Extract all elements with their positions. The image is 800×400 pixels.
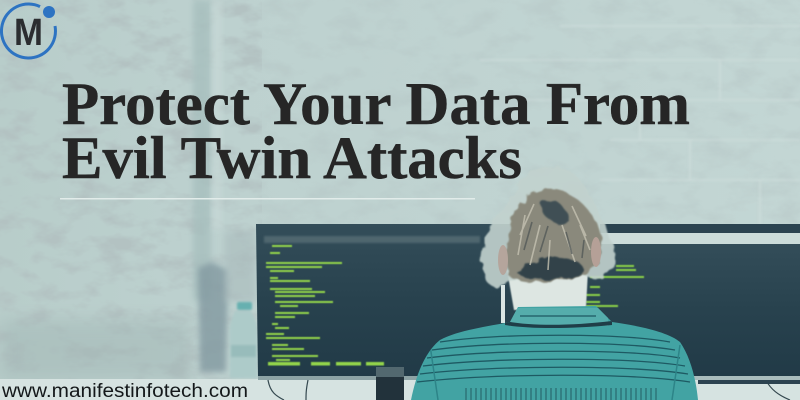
water bottle [230, 302, 257, 378]
monitor stand [376, 367, 404, 400]
cables [268, 378, 790, 400]
code lines: left [266, 245, 384, 366]
desk surface [0, 379, 800, 400]
shirt [411, 306, 698, 400]
code lines: right [586, 265, 644, 307]
title [62, 71, 690, 191]
monitor: left [256, 224, 512, 380]
logo: M in blue ring [1, 4, 55, 58]
title: Evil Twin Attacks [62, 125, 522, 191]
monitor: right [500, 224, 800, 384]
divider under title [60, 198, 475, 200]
person [411, 187, 698, 400]
neck [507, 270, 588, 310]
title: Protect Your Data From [62, 71, 690, 137]
logo: M in blue ring: M [14, 12, 43, 54]
hair [481, 167, 614, 288]
